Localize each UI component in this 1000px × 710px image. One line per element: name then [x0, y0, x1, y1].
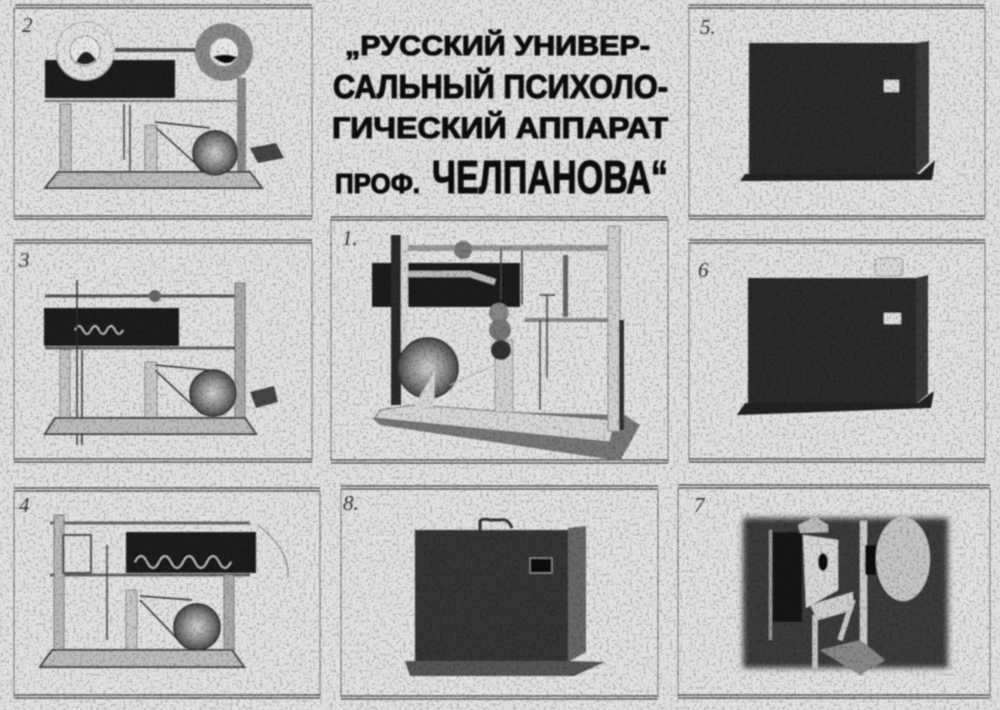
- number 7: 7: [694, 493, 706, 517]
- number 3: 3: [18, 248, 30, 272]
- panel 4: mirrored apparatus: [14, 488, 320, 698]
- number 6: 6: [698, 258, 709, 282]
- case drawing 8: [405, 519, 605, 676]
- projector photo 7: [743, 517, 948, 676]
- panel 2: apparatus with two discs: [14, 5, 312, 219]
- number 2: 2: [22, 13, 33, 37]
- title: ПРОФ.: [335, 168, 420, 199]
- apparatus drawing 1: [372, 226, 640, 461]
- panel 5: dark box: [689, 5, 985, 219]
- apparatus drawing 2: [45, 22, 284, 188]
- box drawing 6: [737, 258, 934, 415]
- apparatus drawing 4: [40, 515, 288, 667]
- number 5: 5.: [700, 15, 716, 39]
- title: [332, 29, 668, 203]
- title: „РУССКИЙ УНИВЕР-: [345, 29, 650, 61]
- panel 6: dark box with lamp: [689, 240, 985, 462]
- title: ГИЧЕСКИЙ АППАРАТ: [332, 111, 668, 145]
- panel 3: apparatus with wave trace: [14, 240, 312, 462]
- number 1: 1.: [342, 226, 358, 250]
- number 4: 4: [19, 493, 30, 517]
- apparatus drawing 3: [44, 280, 278, 445]
- panel 8: case with handle: [341, 486, 658, 699]
- title: САЛЬНЫЙ ПСИХОЛО-: [333, 67, 668, 105]
- box drawing 5: [740, 41, 935, 181]
- panel 7: projection photo: [678, 485, 990, 698]
- panel 1: main apparatus: [331, 217, 668, 463]
- title: ЧЕЛПАНОВА“: [432, 151, 668, 203]
- number 8: 8.: [343, 491, 359, 515]
